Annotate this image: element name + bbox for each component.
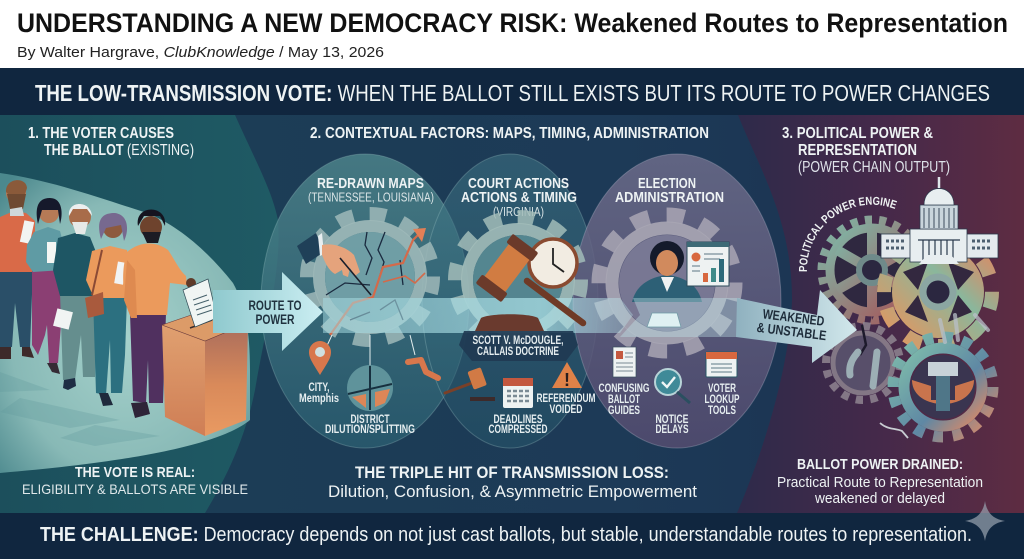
capitol building — [881, 177, 998, 264]
floor shadows — [0, 372, 160, 446]
section heading 3: (POWER CHAIN OUTPUT) — [798, 159, 950, 176]
section heading 3: REPRESENTATION — [798, 142, 917, 159]
sparkle mark — [965, 501, 1005, 541]
icon: warning: ! — [564, 370, 570, 390]
byline: By Walter Hargrave, ClubKnowledge / May 13, 2026 — [17, 45, 384, 61]
map connectors — [325, 335, 415, 365]
route to power arrow: ROUTE TO — [248, 298, 302, 313]
label: district dilution — [325, 414, 415, 436]
section heading 1 — [28, 125, 194, 159]
factor lens: court — [422, 154, 598, 448]
weakened and unstable arrow: WEAKENED — [762, 306, 825, 329]
scales base — [475, 314, 544, 331]
gavel and clock — [476, 234, 583, 323]
label: city: CITY, — [308, 382, 330, 394]
label: lookup tools — [704, 383, 740, 417]
label: city — [299, 382, 339, 405]
caption: triple hit: THE TRIPLE HIT OF TRANSMISSION LOSS: — [355, 463, 669, 482]
label: ballot guides — [598, 383, 650, 417]
factor heading: maps: RE-DRAWN MAPS — [317, 175, 424, 192]
gear: bottom — [893, 337, 993, 437]
icon: city pin — [309, 341, 331, 375]
label: lookup tools: VOTER — [708, 383, 736, 395]
doctrine plaque: CALLAIS DOCTRINE — [477, 346, 559, 358]
factor heading: administration: ELECTION — [638, 175, 696, 192]
caption: vote is real: ELIGIBILITY & BALLOTS ARE VISIBLE — [22, 481, 248, 497]
header background — [0, 0, 1024, 68]
factor heading: administration — [615, 175, 724, 206]
doctrine plaque — [459, 331, 578, 361]
label: lookup tools: TOOLS — [708, 405, 736, 417]
factor heading: maps: (TENNESSEE, LOUISIANA) — [308, 190, 434, 204]
label: referendum — [536, 393, 596, 416]
voter 5 — [123, 210, 196, 418]
icon: ballot guide — [613, 347, 636, 377]
caption: ballot power drained: Practical Route to Representation — [777, 475, 983, 491]
label: notice delays: DELAYS — [656, 424, 689, 436]
caption: triple hit: Dilution, Confusion, & Asymmetric Empowerment — [328, 482, 697, 501]
label: deadlines: COMPRESSED — [488, 424, 548, 436]
caption: ballot power drained: weakened or delayed — [814, 491, 945, 507]
label: notice delays — [656, 414, 689, 436]
icon: voter tool — [706, 352, 737, 377]
ballot box — [162, 312, 248, 436]
map cracks — [326, 232, 403, 320]
factor heading: administration: ADMINISTRATION — [615, 189, 724, 206]
dashboard card — [687, 242, 729, 286]
gear: top left — [822, 220, 922, 320]
panel: power background — [737, 115, 1024, 513]
weakened and unstable arrow: & UNSTABLE — [756, 320, 827, 343]
factor heading: maps — [308, 175, 434, 204]
subtitle band — [0, 68, 1024, 115]
gear: faded — [826, 325, 900, 400]
transmission band — [323, 298, 752, 337]
label: lookup tools: LOOKUP — [704, 394, 740, 406]
power engine gears — [822, 220, 993, 438]
gear: administration — [599, 215, 735, 351]
caption: ballot power drained — [777, 456, 983, 507]
label: deadlines: DEADLINES — [494, 414, 543, 426]
icon: split district — [347, 365, 393, 411]
icon: notice check — [655, 369, 690, 403]
label: deadlines — [488, 414, 548, 436]
label: notice delays: NOTICE — [656, 414, 689, 426]
factor heading: court: COURT ACTIONS — [468, 175, 569, 192]
weakened and unstable arrow — [736, 290, 857, 363]
official figure — [632, 241, 702, 302]
gear: court — [455, 217, 581, 343]
label: ballot guides: CONFUSING — [598, 383, 650, 395]
debris — [880, 423, 908, 438]
doctrine plaque: SCOTT V. McDOUGLE, — [472, 335, 564, 347]
icon: small gavel — [445, 367, 495, 401]
gear: maps — [307, 214, 433, 340]
voter 3 — [53, 204, 100, 390]
ballot paper — [183, 279, 217, 327]
rising route arrow — [330, 228, 426, 335]
engine label: POLITICAL POWER ENGINE — [798, 196, 898, 272]
voter 2 — [26, 198, 65, 374]
section heading 1: THE BALLOT (EXISTING) — [44, 142, 194, 159]
factor heading: court — [461, 175, 577, 219]
label: district dilution: DILUTION/SPLITTING — [325, 424, 415, 436]
caption: vote is real — [22, 464, 248, 497]
icon: broken link — [408, 360, 438, 378]
panel: voter background — [0, 115, 279, 513]
caption: triple hit — [328, 463, 697, 501]
section heading 3: 3. POLITICAL POWER & — [782, 125, 933, 142]
section heading 1: 1. THE VOTER CAUSES — [28, 125, 174, 142]
factor heading: court: (VIRGINIA) — [493, 205, 544, 219]
factor lens: administration — [573, 154, 781, 448]
challenge band — [0, 513, 1024, 559]
voter 1 — [0, 180, 35, 359]
open book — [647, 313, 681, 327]
label: city: Memphis — [299, 393, 339, 405]
route to power arrow — [213, 272, 323, 351]
icon: warning — [552, 362, 582, 390]
label: ballot guides: BALLOT — [608, 394, 640, 406]
section heading 3 — [782, 125, 950, 176]
label: ballot guides: GUIDES — [608, 405, 640, 417]
hand with pen — [297, 233, 371, 295]
gear: top right — [884, 238, 992, 346]
broken figures — [940, 315, 988, 342]
voters queue — [0, 180, 196, 418]
factor lens: maps — [261, 154, 469, 448]
icon: calendar — [503, 378, 533, 408]
section heading 2: 2. CONTEXTUAL FACTORS: MAPS, TIMING, ADMINISTRATION — [310, 125, 709, 142]
voter backdrop blob — [0, 173, 250, 473]
factor heading: court: ACTIONS & TIMING — [461, 189, 577, 206]
caption: vote is real: THE VOTE IS REAL: — [75, 464, 195, 481]
route to power arrow: POWER — [256, 312, 295, 327]
label: referendum: VOIDED — [550, 404, 582, 416]
voter 4 — [85, 213, 129, 406]
caption: ballot power drained: BALLOT POWER DRAINED: — [797, 456, 963, 473]
label: referendum: REFERENDUM — [536, 393, 596, 405]
label: district dilution: DISTRICT — [350, 414, 390, 426]
